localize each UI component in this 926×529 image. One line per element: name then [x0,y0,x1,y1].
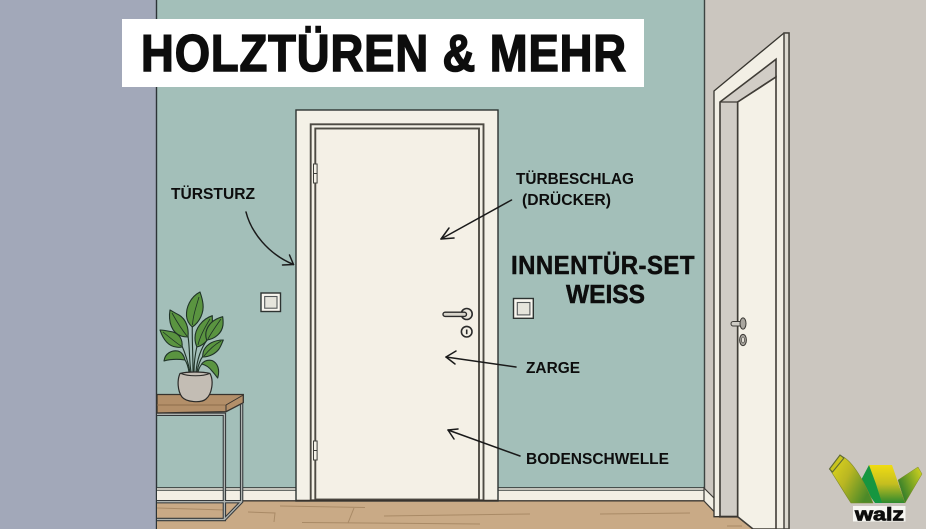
wood floor [157,502,753,529]
label: Zarge: ZARGE [526,360,580,377]
logo: Walz [830,455,922,524]
label: Innentür-Set Weiss [511,251,695,309]
arrow: Zarge [446,351,516,367]
panel: right beige wall [704,0,926,529]
panel: left blue-grey wall [0,0,156,529]
right side door in perspective [704,33,789,529]
pot [178,372,212,402]
panel: teal wall [156,0,705,529]
icon: side door keyhole [740,334,746,346]
baseboard [157,488,704,501]
arrow: Türbeschlag [441,200,512,239]
plant in pot [160,292,223,402]
icon: lower hinge [314,441,317,460]
icon: keyhole [461,326,472,337]
main door frame and door leaf [296,110,498,501]
arrow: Türsturz [246,212,294,265]
side table [157,394,243,520]
label: Innentür-Set Weiss: WEISS [566,281,645,309]
title banner: HOLZTÜREN & MEHR [141,25,627,83]
top leaf [186,292,203,327]
logo: Walz: walz [854,504,904,524]
icon: upper hinge [314,164,317,183]
label: Türbeschlag (Drücker): TÜRBESCHLAG [516,171,634,188]
arrow: Bodenschwelle [448,429,520,456]
icon: door handle [443,308,472,320]
label: Türsturz: TÜRSTURZ [171,184,255,203]
label: Bodenschwelle: BODENSCHWELLE [526,451,669,468]
label: Innentür-Set Weiss: INNENTÜR-SET [511,251,695,280]
icon: light switch right [514,298,533,318]
label: Türbeschlag (Drücker) [516,171,634,209]
icon: side door handle [731,318,746,329]
label: Türbeschlag (Drücker): (DRÜCKER) [522,192,611,209]
icon: light switch left [261,293,280,312]
